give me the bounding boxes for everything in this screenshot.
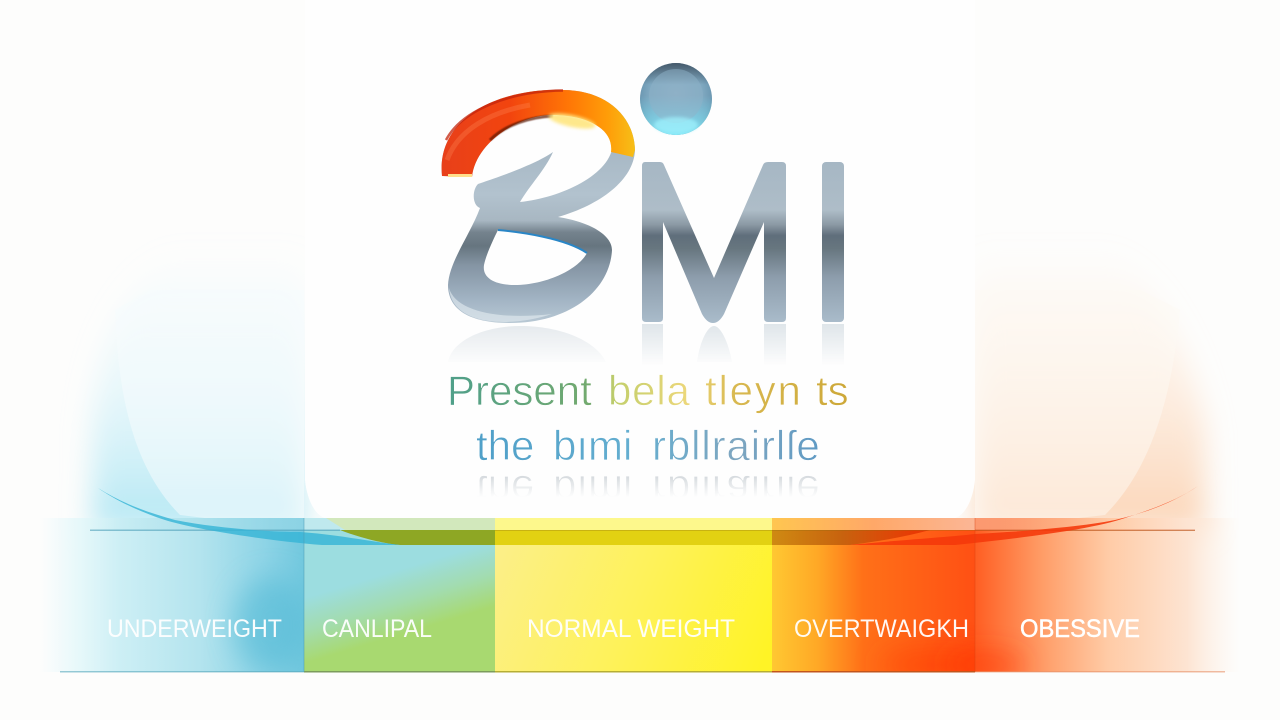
bottom edge line bbox=[60, 671, 1225, 672]
subtitle reflection: rbllrairlſe bbox=[652, 467, 821, 514]
left blue veil bbox=[92, 250, 304, 530]
right orange veil bbox=[975, 250, 1205, 530]
segment: second category bbox=[304, 518, 495, 672]
segment: obese bbox=[965, 518, 1226, 672]
subtitle line one: Present bbox=[447, 367, 592, 414]
label: canlipal: CANLIPAL bbox=[322, 615, 432, 643]
subtitle reflection: the bbox=[476, 467, 534, 514]
center white panel bbox=[305, 0, 975, 518]
label: underweight: UNDERWEIGHT bbox=[107, 615, 282, 643]
label: obessive: OBESSIVE bbox=[1020, 615, 1140, 643]
letter I bbox=[822, 162, 844, 322]
subtitle reflection bbox=[480, 476, 818, 492]
subtitle line two: the bbox=[476, 422, 534, 469]
label: normal weight: NORMAL WEIGHT bbox=[527, 615, 735, 643]
subtitle line two: rbllrairlſe bbox=[652, 422, 821, 469]
label: overtwaigkh: OVERTWAIGKH bbox=[794, 615, 969, 643]
subtitle line one: bela bbox=[608, 367, 691, 414]
letter B bbox=[442, 90, 635, 323]
dark strip bbox=[90, 530, 1195, 545]
letter M bbox=[642, 162, 786, 323]
subtitle line one: tleyn bbox=[705, 367, 803, 414]
subtitle line two: bımi bbox=[553, 422, 632, 469]
coloured top arc bbox=[442, 90, 635, 177]
blue swoosh bbox=[98, 488, 400, 545]
top light strip bbox=[90, 518, 1135, 530]
segment: underweight bbox=[40, 518, 310, 673]
category labels bbox=[107, 615, 1140, 643]
dot sphere bbox=[640, 63, 712, 135]
logo reflection bbox=[453, 324, 844, 354]
subtitle reflection: bımi bbox=[553, 467, 632, 514]
segment: overweight bbox=[772, 530, 975, 671]
subtitle line one: ts bbox=[816, 367, 849, 414]
BMI band bbox=[40, 486, 1240, 679]
segment: normal weight bbox=[495, 518, 772, 672]
red swoosh bbox=[850, 486, 1198, 545]
BMI logo bbox=[442, 63, 844, 366]
divider lines bbox=[304, 518, 976, 672]
